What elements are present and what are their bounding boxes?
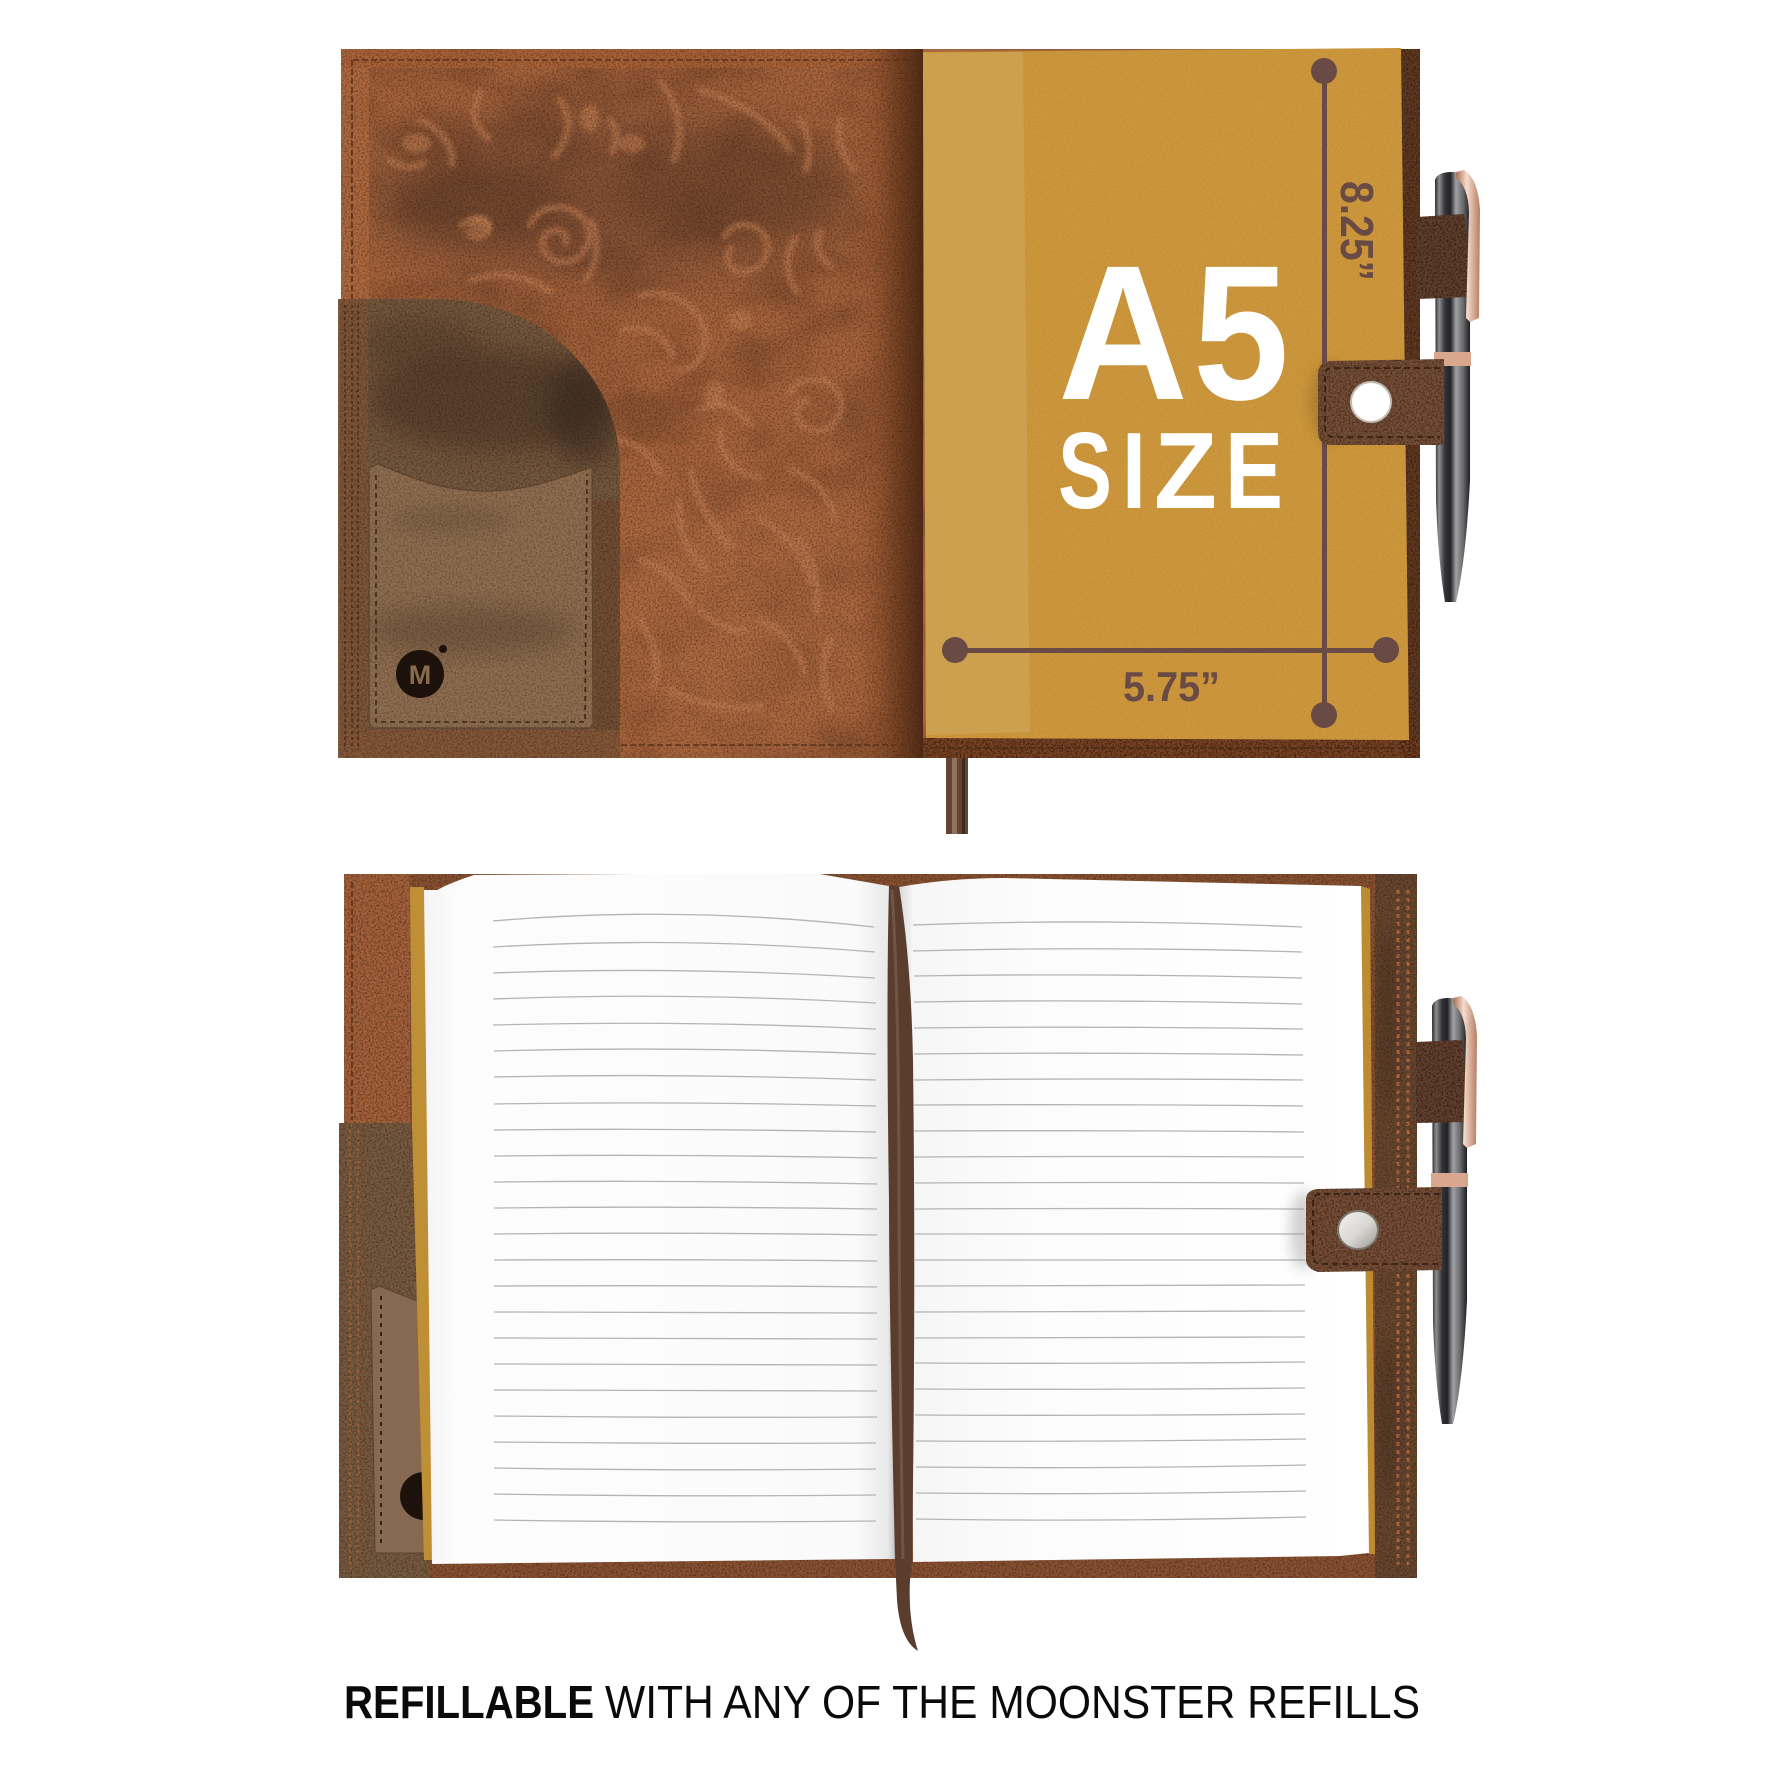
horizontal dimension line: [942, 637, 1399, 663]
left ruled page: [424, 873, 895, 1564]
bookmark ribbon: top journal: [946, 738, 968, 834]
panel: open journal with ruled pages: [339, 873, 1477, 1651]
kraft notebook: [923, 48, 1409, 740]
leather pocket panel with curved edge: [338, 299, 621, 758]
logo: M badge: M: [409, 660, 431, 690]
pen clip: [1453, 996, 1477, 1148]
bookmark ribbon: bottom journal: [888, 886, 918, 1651]
kraft inner cover edges: [410, 886, 1375, 1560]
closure strap: bottom journal: [1306, 1187, 1442, 1272]
panel: open journal cover with kraft notebook: [338, 48, 1480, 834]
label: SIZE: E: [1225, 410, 1283, 532]
pen loop: [1417, 214, 1468, 299]
snap button: [1351, 382, 1391, 422]
card slot, mostly hidden: [371, 1286, 430, 1553]
label: A5: A: [1058, 225, 1188, 440]
pen loop: [1416, 1040, 1466, 1123]
pen: bottom journal: [1416, 996, 1477, 1424]
closure strap: top journal: [1318, 359, 1444, 445]
kraft tape strip: [923, 52, 1030, 735]
strap shadow on kraft: [1310, 362, 1350, 442]
label: 8.25 inches: 8.25”: [1331, 181, 1383, 281]
card slot pocket: [365, 464, 593, 728]
logo, partly hidden: [400, 1472, 448, 1520]
logo: M badge: [396, 645, 447, 698]
pen collar: [1431, 1173, 1468, 1187]
embossed floral swirls: [390, 82, 854, 708]
label: 5.75 inches: 5.75”: [1123, 663, 1220, 710]
vertical dimension line: [1311, 58, 1337, 728]
leather cover: top journal: [341, 49, 1420, 758]
right ruled page: [899, 878, 1369, 1562]
embossed highlights: [403, 104, 752, 409]
caption: REFILLABLE: [344, 1676, 594, 1728]
pen collar: [1434, 352, 1471, 366]
snap button: [1338, 1211, 1378, 1249]
label: SIZE: Z: [1154, 410, 1217, 532]
leather cover: bottom journal: [344, 874, 1417, 1578]
label: SIZE: S: [1058, 410, 1112, 532]
label: SIZE: I: [1122, 410, 1146, 532]
strap shadow on page: [1290, 1190, 1318, 1270]
label: A5: 5: [1193, 225, 1289, 440]
pen clip: [1456, 170, 1480, 322]
caption: WITH ANY OF THE MOONSTER REFILLS: [605, 1676, 1420, 1728]
pen: top journal: [1417, 170, 1480, 602]
leather pocket, mostly hidden: [339, 1123, 448, 1578]
